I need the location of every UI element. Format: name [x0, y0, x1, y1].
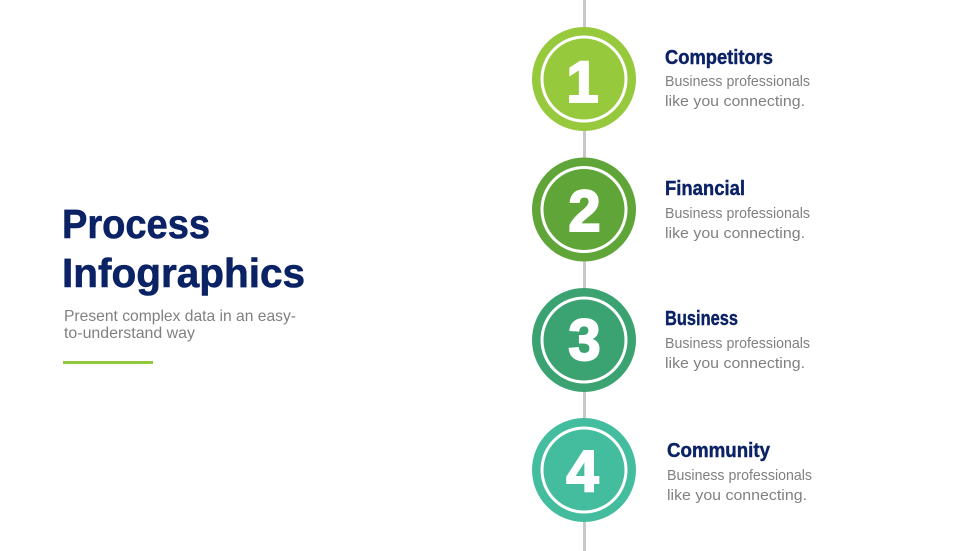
- title: Process: [62, 201, 210, 247]
- step 3 number badge: 3: [568, 308, 601, 373]
- step 1 number badge: [532, 27, 636, 131]
- panel: step 4 community: [532, 418, 812, 522]
- step 4 number badge: [532, 418, 636, 522]
- step 4 number badge: 4: [566, 439, 599, 504]
- step 3 heading: Business: [665, 308, 738, 330]
- step 1 description: [665, 73, 810, 110]
- step 3 description: like you connecting.: [665, 355, 805, 372]
- step 3 number badge: [532, 288, 636, 392]
- title: Infographics: [62, 250, 305, 296]
- accent bar: [63, 361, 153, 364]
- step 2 description: [665, 205, 810, 242]
- panel: step 2 financial: [532, 158, 810, 262]
- step 3 description: [665, 335, 810, 372]
- vertical timeline line: [583, 0, 586, 551]
- step 1 description: like you connecting.: [665, 93, 805, 110]
- step 2 number badge: [532, 158, 636, 262]
- step 2 number badge: 2: [568, 179, 601, 244]
- subtitle: to-understand way: [64, 325, 195, 342]
- step 2 description: like you connecting.: [665, 225, 805, 242]
- step 4 heading: Community: [667, 440, 771, 462]
- step 3 description: Business professionals: [665, 335, 810, 352]
- subtitle: Present complex data in an easy-: [64, 308, 296, 325]
- step 2 heading: Financial: [665, 178, 745, 200]
- title: [62, 201, 305, 296]
- panel: step 3 business: [532, 288, 810, 392]
- step 1 number badge: 1: [566, 50, 599, 115]
- subtitle: [64, 308, 296, 342]
- step 4 description: like you connecting.: [667, 487, 807, 504]
- step 4 description: Business professionals: [667, 467, 812, 484]
- step 2 description: Business professionals: [665, 205, 810, 222]
- panel: title block: [62, 201, 305, 364]
- step 4 description: [667, 467, 812, 504]
- step 1 heading: Competitors: [665, 47, 773, 69]
- panel: step 1 competitors: [532, 27, 810, 131]
- step 1 description: Business professionals: [665, 73, 810, 90]
